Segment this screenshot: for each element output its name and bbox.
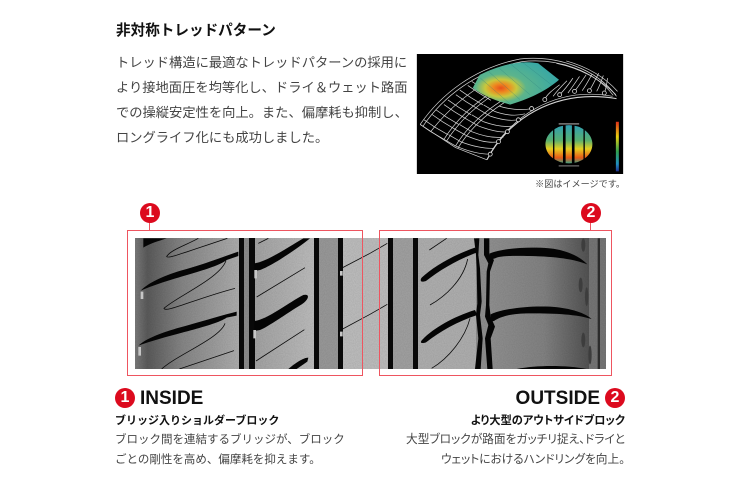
leader line 2 [590,222,591,230]
badge 2 [605,388,625,408]
outside grooves [370,238,600,369]
inside heading: INSIDE [140,388,203,409]
image note: ※図はイメージです。 [535,179,625,189]
badge 1: 1 [121,389,129,406]
badge 2: 2 [611,389,619,406]
marker 1 [140,203,160,223]
outside description [406,432,625,466]
tread ribs [135,238,239,369]
outside heading: OUTSIDE [516,388,600,409]
badge 1 [115,388,135,408]
outside subheading: より大型のアウトサイドブロック [471,415,625,427]
color scale [616,122,619,171]
footprint contact map [545,123,592,166]
intro text block: トレッド構造に最適なトレッドパターンの採用に [116,55,407,70]
title: 非対称トレッドパターン [116,23,276,39]
inside description: ごとの剛性を高め、偏摩耗を抑えます。 [115,454,321,466]
outside description: 大型ブロックが路面をガッチリ捉え、ドライと [406,433,625,446]
marker 2 [581,203,601,223]
heat map overlay [473,62,559,105]
callout frame 2 [379,230,612,376]
callout frame 1 [127,230,363,376]
intro text block: ロングライフ化にも成功しました。 [116,130,328,145]
marker 1: 1 [146,204,154,221]
tire wireframe [420,58,618,160]
leader line 1 [149,222,150,230]
marker 2: 2 [587,204,595,221]
intro text block: より接地面圧を均等化し、ドライ＆ウェット路面 [116,80,408,95]
intro text block: での操縦安定性を向上。また、偏摩耗も抑制し、 [116,105,408,120]
inside subheading: ブリッジ入りショルダーブロック [115,415,279,427]
intro text block [116,55,408,145]
inside grooves [138,238,370,369]
inside section [115,388,345,466]
outside section [406,388,625,466]
outside description: ウェットにおけるハンドリングを向上。 [441,453,625,466]
inside description [115,433,345,466]
heat map tire illustration [416,54,624,174]
tire tread photo [135,238,606,369]
inside description: ブロック間を連結するブリッジが、ブロック [115,434,345,446]
